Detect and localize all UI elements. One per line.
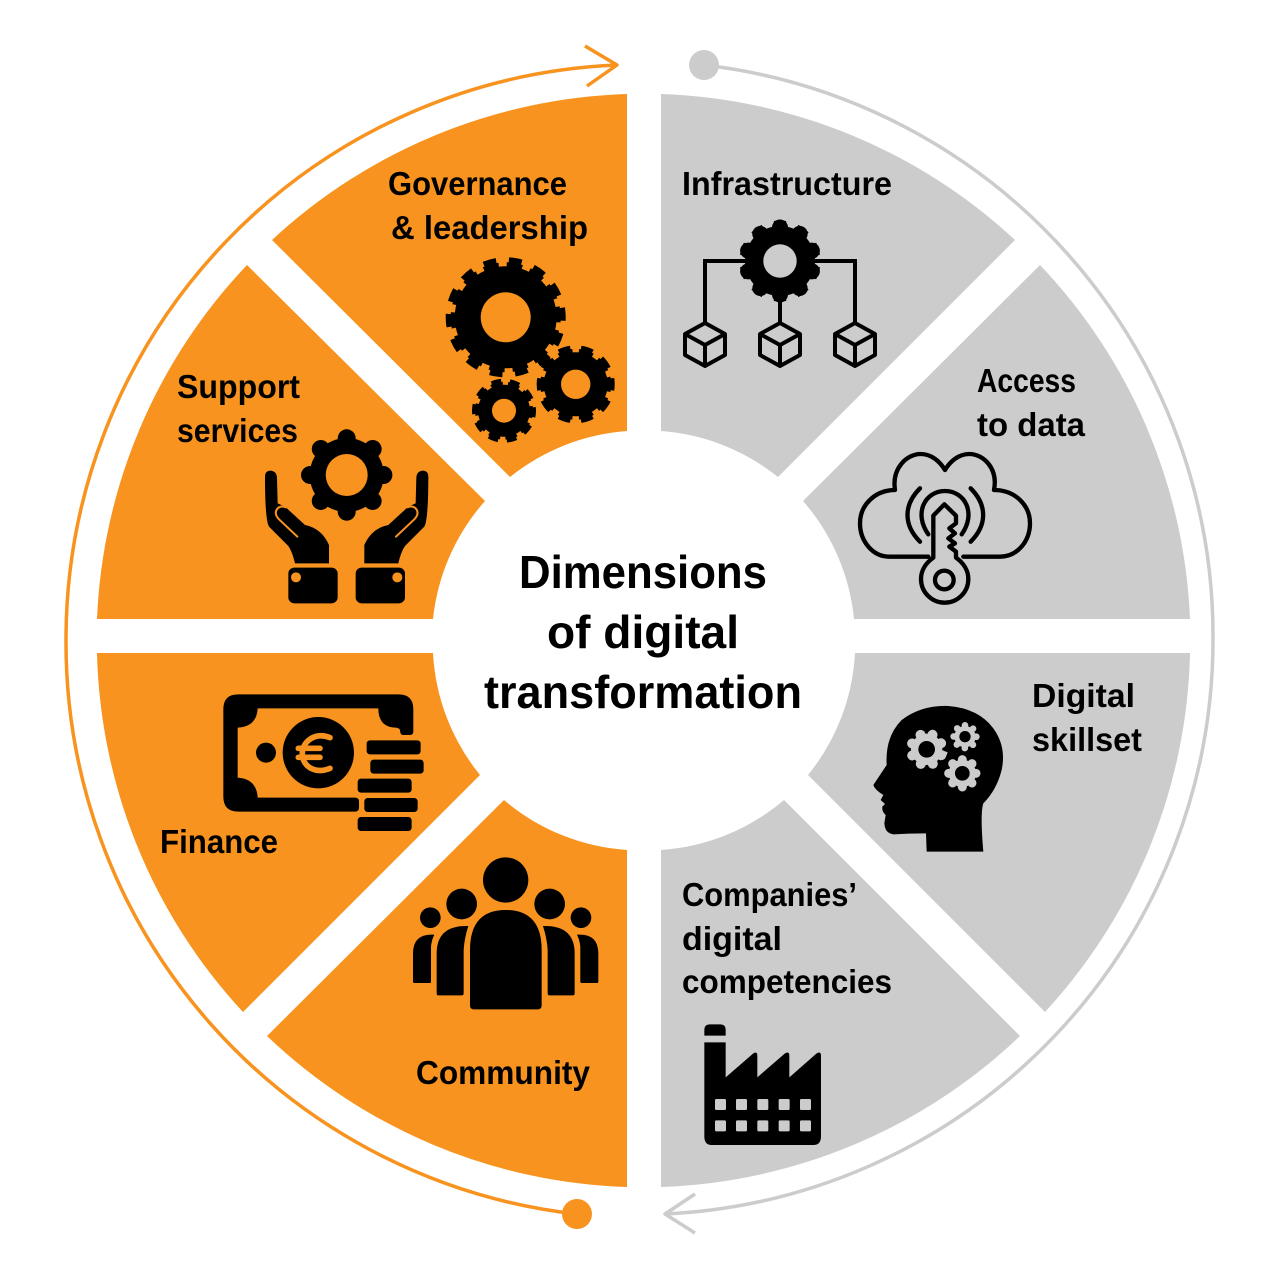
heading: support services: services [177, 412, 298, 449]
heading: governance and leadership [388, 165, 588, 246]
heading: community: Community [416, 1054, 591, 1091]
heading: companies' digital competencies: Companies’ [682, 876, 857, 913]
heading: access to data: Access [977, 362, 1076, 399]
panel: community [267, 800, 627, 1187]
title: Dimensions [519, 546, 767, 598]
grey cycle arrow [665, 50, 1213, 1233]
icon: group of people [413, 857, 598, 1009]
panel: finance [97, 653, 480, 1012]
icon: euro banknote with coins [223, 694, 424, 831]
panel: governance and leadership [272, 94, 627, 477]
heading: finance: Finance [160, 823, 278, 860]
title: transformation [484, 666, 802, 718]
title: of digital [547, 606, 739, 658]
heading: governance and leadership: & leadership [391, 209, 588, 246]
title [484, 546, 802, 718]
heading: infrastructure: Infrastructure [682, 165, 892, 202]
icon: hands holding gear [265, 438, 428, 603]
heading: digital skillset [1032, 677, 1142, 758]
panel: access to data [803, 265, 1190, 619]
heading: digital skillset: Digital [1032, 677, 1135, 714]
heading: companies' digital competencies [682, 876, 892, 1000]
heading: companies' digital competencies: competencies [682, 963, 892, 1000]
heading: support services: Support [177, 368, 300, 405]
panel: companies' digital competencies [661, 800, 1020, 1187]
panel: infrastructure [661, 94, 1015, 477]
heading: access to data: to data [977, 406, 1086, 443]
icon: gear network with cubes [685, 226, 875, 366]
panel: digital skillset [808, 653, 1190, 1012]
icon: factory [704, 1024, 821, 1145]
icon: cloud with key [860, 454, 1030, 603]
orange cycle arrow [66, 46, 617, 1229]
heading: digital skillset: skillset [1032, 721, 1142, 758]
heading: governance and leadership: Governance [388, 165, 567, 202]
icon: three gears [443, 255, 619, 445]
heading: access to data [977, 362, 1086, 443]
heading: companies' digital competencies: digital [682, 920, 782, 957]
panel: support services [97, 265, 485, 619]
heading: support services [177, 368, 300, 449]
icon: head with gears [873, 706, 1003, 852]
